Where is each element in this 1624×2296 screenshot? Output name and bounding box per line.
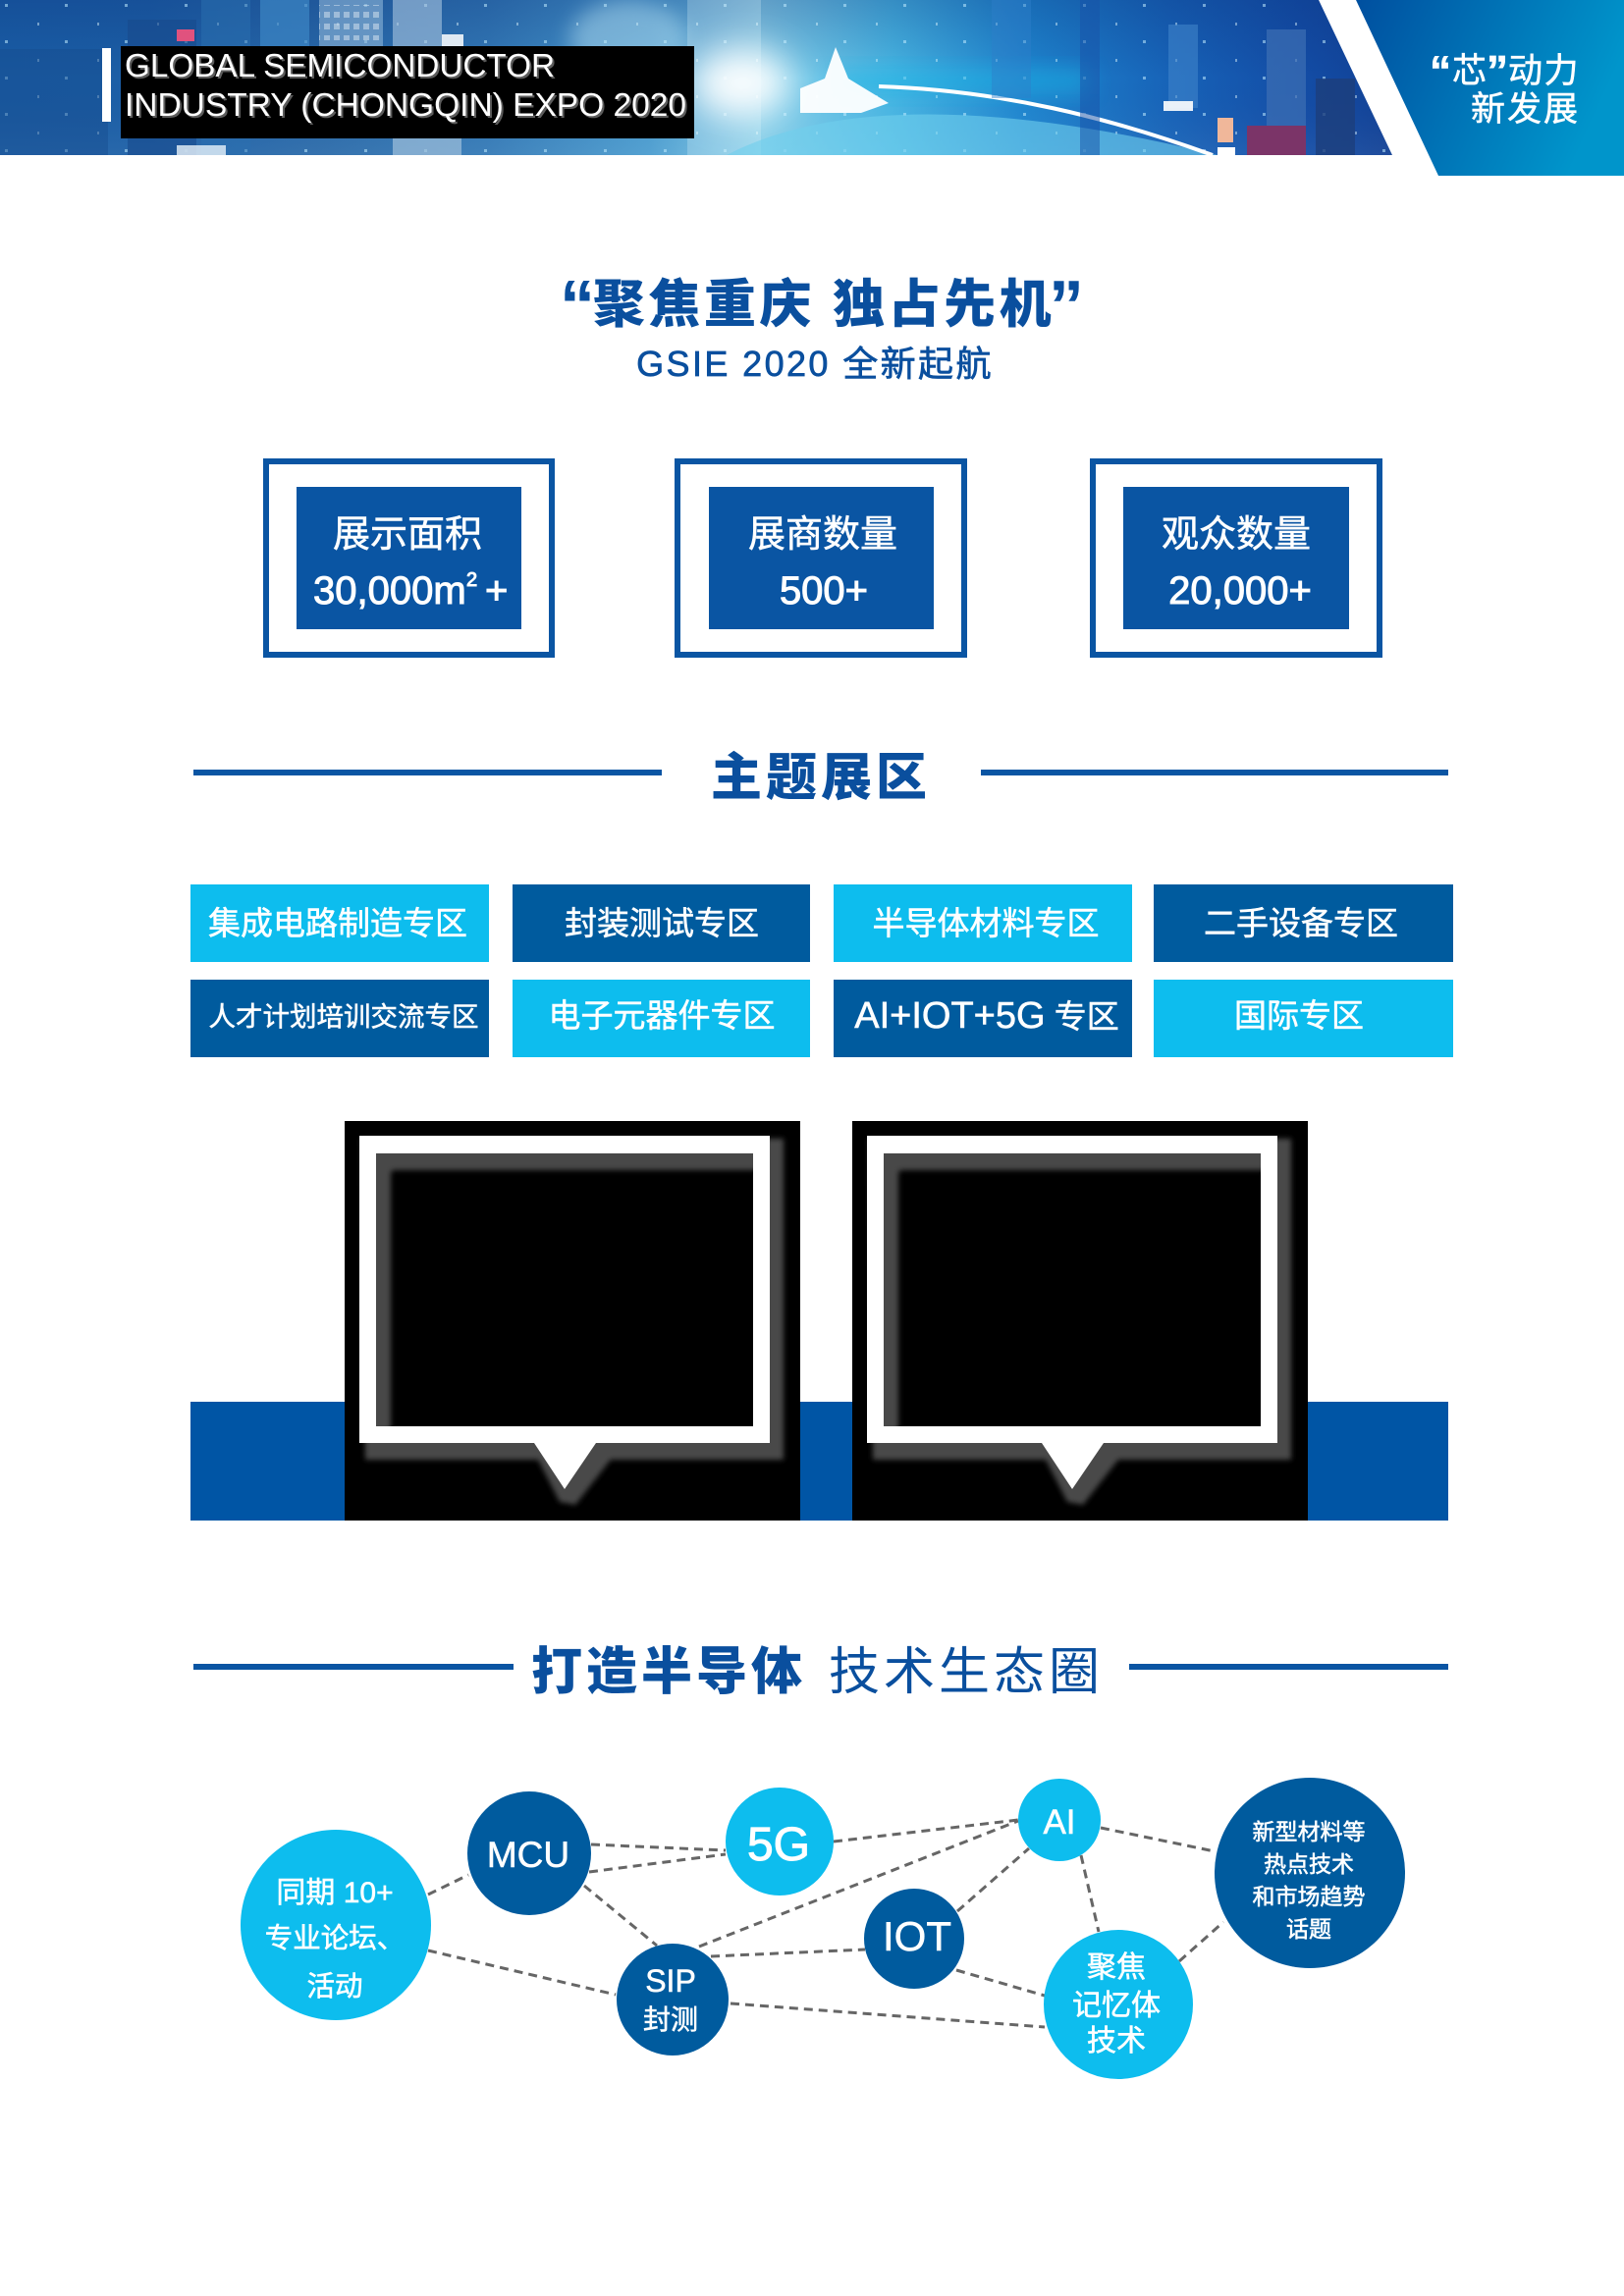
- section heading: ecosystem: 打造半导体: [531, 1644, 806, 1701]
- stat: exhibition area: 2: [466, 569, 477, 591]
- zone: talent: 人才计划培训交流专区: [208, 1001, 479, 1032]
- zone: IC manufacturing: 集成电路制造专区: [208, 905, 467, 941]
- section heading: theme zones: 主题展区: [711, 750, 931, 807]
- blue tab: [1356, 0, 1624, 176]
- node: AI: AI: [1043, 1803, 1076, 1842]
- zone: packaging test: [513, 884, 810, 962]
- section heading: ecosystem: 技术生态圈: [829, 1644, 1104, 1701]
- node: new materials: 新型材料等: [1253, 1819, 1365, 1844]
- node: new materials: [1215, 1778, 1405, 1968]
- node: IOT: IOT: [883, 1913, 951, 1959]
- tab slogan: “: [1430, 47, 1451, 95]
- tab slogan: 芯: [1452, 52, 1487, 90]
- accent bar: [102, 48, 111, 122]
- dashed connectors: [428, 1820, 1223, 2027]
- expo name: INDUSTRY (CHONGQIN) EXPO 2020: [125, 86, 686, 123]
- zone grid: [190, 884, 1453, 1057]
- node: memory: [1044, 1930, 1193, 2079]
- title: 聚焦重庆 独占先机: [593, 276, 1055, 334]
- header banner: [0, 0, 1624, 176]
- node: 5G: 5G: [747, 1819, 810, 1871]
- stat: exhibitors: 展商数量: [748, 514, 897, 556]
- node: forums: [241, 1830, 431, 2020]
- node: SIP: [617, 1944, 729, 2056]
- expo name: INDUSTRY (CHONGQIN) EXPO 2020: [127, 88, 688, 125]
- stat: exhibition area: 展示面积: [333, 514, 482, 556]
- tab slogan: 动力: [1508, 52, 1580, 90]
- zone: IC manufacturing: [190, 884, 489, 962]
- stat: exhibitors: [677, 461, 964, 655]
- zone: international: 国际专区: [1234, 997, 1364, 1034]
- blue band: [190, 1402, 1448, 1521]
- title: “: [560, 267, 595, 346]
- stat: exhibitors: 500+: [780, 569, 868, 613]
- node: SIP: SIP: [645, 1963, 696, 1999]
- speech frame left: [345, 1121, 800, 1521]
- zone: electronic components: 电子元器件专区: [548, 997, 776, 1034]
- node: forums: 活动: [306, 1971, 363, 2002]
- zone: talent: [190, 980, 489, 1057]
- tab slogan: [1430, 47, 1580, 129]
- node: MCU: MCU: [487, 1835, 569, 1875]
- expo name: GLOBAL SEMICONDUCTOR: [125, 47, 555, 83]
- node: new materials: 话题: [1286, 1916, 1331, 1942]
- title: ”: [1049, 267, 1084, 346]
- title: [560, 267, 1084, 384]
- zone: electronic components: [513, 980, 810, 1057]
- city photo strip: [0, 0, 1392, 155]
- stat: visitors: [1093, 461, 1380, 655]
- stat: exhibition area: 30,000m: [313, 569, 466, 613]
- node: new materials: 和市场趋势: [1253, 1884, 1365, 1909]
- stat: exhibition area: +: [485, 569, 508, 613]
- stat: visitors: 观众数量: [1162, 514, 1311, 556]
- node: memory: 技术: [1087, 2025, 1146, 2057]
- node: forums: 同期 10+: [276, 1877, 394, 1909]
- tab slogan: ”: [1487, 47, 1508, 95]
- zone: AI IOT 5G: AI+IOT+5G 专区: [854, 995, 1119, 1037]
- ecosystem network: [241, 1778, 1405, 2079]
- node: memory: 聚焦: [1087, 1951, 1146, 1984]
- section heading: theme zones: [193, 750, 1448, 807]
- node: SIP: 封测: [643, 2004, 698, 2035]
- zone: AI IOT 5G: [834, 980, 1132, 1057]
- zone: used equipment: 二手设备专区: [1204, 905, 1398, 941]
- zone: used equipment: [1154, 884, 1453, 962]
- zone: materials: [834, 884, 1132, 962]
- node: MCU: [467, 1791, 591, 1915]
- zone: packaging test: 封装测试专区: [565, 905, 759, 941]
- expo name: [121, 46, 694, 138]
- zone: international: [1154, 980, 1453, 1057]
- speech frame right: [852, 1121, 1308, 1521]
- node: forums: 专业论坛、: [265, 1923, 405, 1954]
- zone: materials: 半导体材料专区: [872, 905, 1100, 941]
- tab slogan: 新发展: [1471, 90, 1580, 129]
- node: new materials: 热点技术: [1264, 1851, 1354, 1877]
- node: 5G: [726, 1788, 834, 1896]
- node: AI: [1018, 1779, 1101, 1861]
- expo name: GLOBAL SEMICONDUCTOR: [127, 49, 557, 85]
- stat: visitors: 20,000+: [1168, 569, 1312, 613]
- subtitle: GSIE 2020 全新起航: [636, 344, 994, 384]
- stat: exhibition area: [266, 461, 552, 655]
- section heading: ecosystem: [193, 1644, 1448, 1701]
- node: memory: 记忆体: [1072, 1990, 1161, 2022]
- node: IOT: [864, 1889, 964, 1989]
